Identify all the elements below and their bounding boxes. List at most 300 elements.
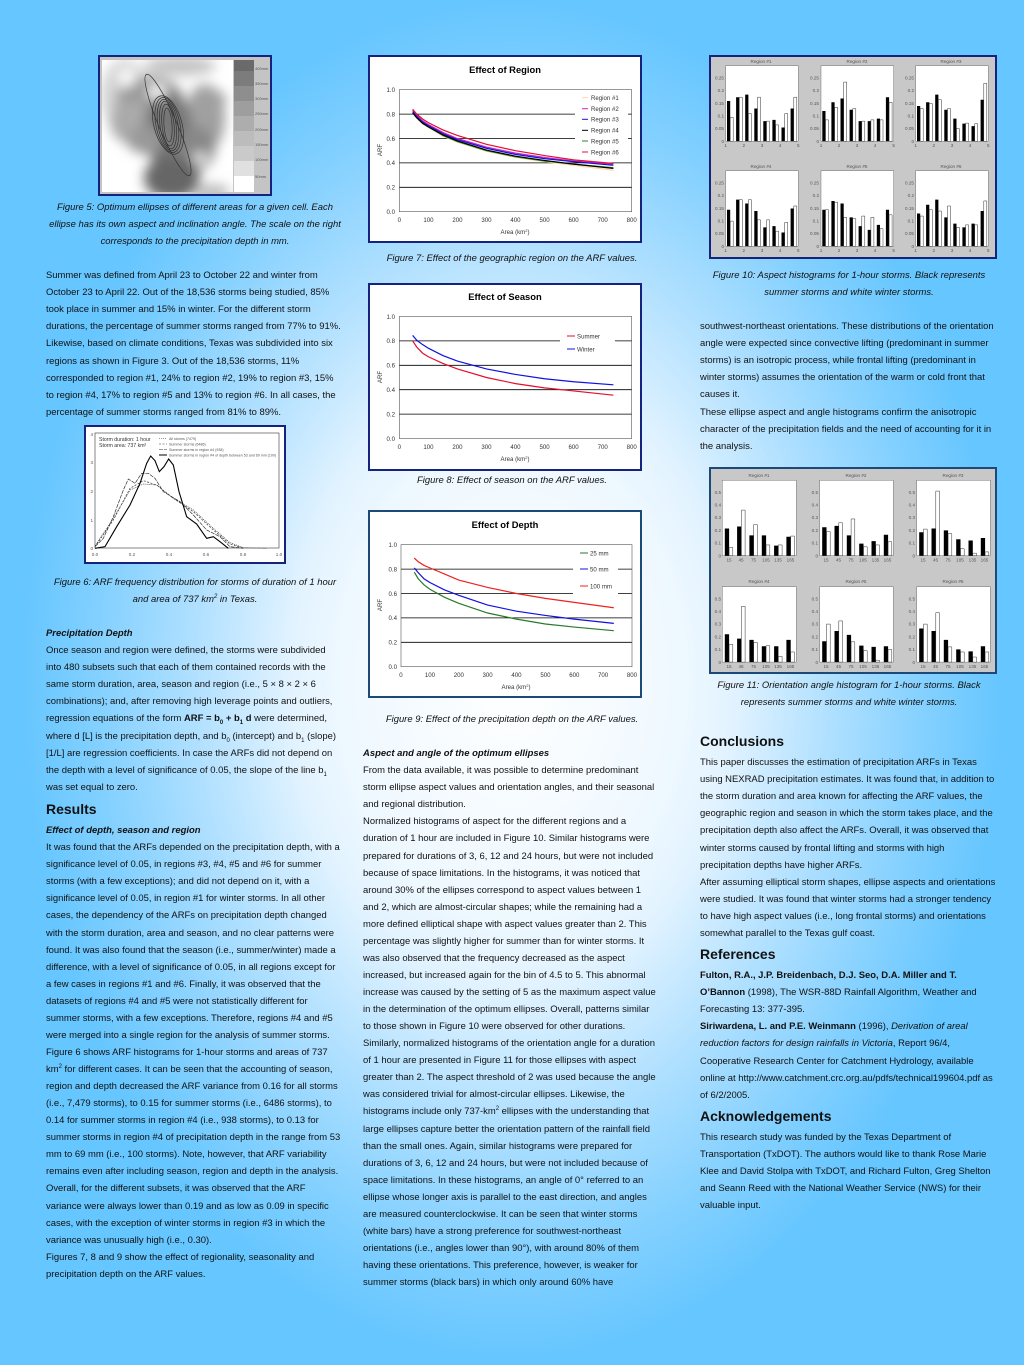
chart: effect of depth: 25 mm bbox=[590, 550, 609, 557]
text: acknowledgements: This research study was funded by the Texas Department of bbox=[700, 1132, 951, 1143]
text: orientation discussion: angle were expected since convective lifting (predominant in summer bbox=[700, 338, 989, 349]
chart: effect of season: ) bbox=[527, 456, 529, 463]
figure 5: optimum ellipses map bbox=[98, 55, 272, 196]
chart: effect of region: 700 bbox=[598, 217, 608, 224]
figure 11: orientation angle histograms: 105 bbox=[762, 664, 770, 669]
text: aspect and angle: orientations (i.e., angles lower than 90°), with around 80% of them bbox=[363, 1243, 639, 1254]
figure 11: orientation angle histograms: 0.4 bbox=[812, 609, 818, 614]
figure 5 caption bbox=[49, 202, 342, 247]
panel: region 2 angle: Region #2 bbox=[846, 473, 867, 478]
figure 10: aspect histograms: 4 bbox=[874, 248, 877, 253]
figure 11: orientation angle histograms: 75 bbox=[848, 664, 854, 669]
figure 11: orientation angle histograms: 0.3 bbox=[812, 515, 818, 520]
text: results: km2 for different cases. It can be seen that the accounting of season, bbox=[46, 1064, 332, 1075]
text: references: of 6/2/2005. bbox=[700, 1090, 750, 1101]
figure 10: aspect histograms: 4 bbox=[779, 143, 782, 148]
chart: effect of region: 1.0 bbox=[387, 87, 396, 94]
figure 11: orientation angle histograms: 0.3 bbox=[715, 515, 721, 520]
scale stripes: 350mm bbox=[255, 81, 269, 86]
chart: effect of season: 700 bbox=[598, 444, 608, 451]
text: precipitation depth bbox=[46, 645, 336, 793]
chart: effect of depth bbox=[368, 510, 642, 698]
text: results: (i.e., 7,479 storms), to 0.15 for summer storms (i.e., 6486 storms), to bbox=[46, 1098, 332, 1109]
chart: effect of region: 0.4 bbox=[387, 160, 396, 167]
text: acknowledgements: and Seann Reed with the National Weather Service (NWS) for their bbox=[700, 1183, 981, 1194]
chart: effect of depth: Area (km bbox=[502, 684, 526, 691]
figure 6: ARF frequency distribution: 0.0 bbox=[92, 552, 99, 557]
panel: region 1 aspect bbox=[726, 59, 798, 141]
text: results: were merged into a single region for the analysis of summer storms. bbox=[46, 1030, 330, 1041]
panel: region 1 aspect: Region #1 bbox=[751, 59, 772, 64]
figure 6: ARF frequency distribution: Summer storms in region #4 of depth between 53 and 69 mm (100) bbox=[169, 454, 276, 458]
figure 10: aspect histograms: 1 bbox=[914, 143, 917, 148]
text: precipitation depth: regression equations of the form ARF = b0 + b1 d were determined, bbox=[46, 713, 327, 726]
text: precipitation depth: where d [L] is the precipitation depth, and b0 (intercept) and b1 (slope) bbox=[46, 730, 336, 743]
figure 6: ARF frequency distribution: Storm duration: 1 hour bbox=[99, 437, 151, 443]
chart: effect of region: 400 bbox=[510, 217, 521, 224]
text: aspect and angle: (white bars) have a strong preference for southwest-northeast bbox=[363, 1226, 621, 1237]
figure 10: aspect histograms: 5 bbox=[987, 143, 990, 148]
panel: region 6 angle bbox=[917, 579, 990, 662]
chart: effect of region: 0 bbox=[398, 217, 402, 224]
figure 11: orientation angle histograms: 75 bbox=[945, 664, 951, 669]
scale stripes: 200mm bbox=[255, 127, 269, 132]
nested ellipses bbox=[138, 71, 198, 179]
figure 11: orientation angle histograms: 45 bbox=[933, 664, 938, 669]
figure 10: aspect histograms: 0 bbox=[911, 139, 914, 144]
chart: effect of season: 200 bbox=[452, 444, 463, 451]
figure 10: aspect histograms: 4 bbox=[969, 143, 972, 148]
figure 11: orientation angle histograms: 0.1 bbox=[909, 647, 915, 652]
figure 11: orientation angle histograms: 0.1 bbox=[715, 540, 721, 546]
figure 10: aspect histograms: 0.1 bbox=[718, 218, 724, 224]
chart: effect of depth: 0.8 bbox=[389, 566, 398, 573]
figure 10: aspect histograms: 5 bbox=[987, 248, 990, 253]
figure 10: aspect histograms: 5 bbox=[797, 143, 800, 148]
figure 10: aspect histograms: 0 bbox=[816, 244, 819, 249]
figure 6: ARF frequency distribution: 0.4 bbox=[166, 552, 173, 557]
figure 11: orientation angle histograms: 105 bbox=[956, 664, 964, 669]
figure 11: orientation angle histograms: 165 bbox=[981, 664, 989, 669]
figure 11: orientation angle histograms: 165 bbox=[981, 558, 989, 562]
figure 10: aspect histograms: 3 bbox=[761, 143, 764, 148]
text: aspect and angle: to those shown in Figure 10 were observed for other durations. bbox=[363, 1021, 625, 1032]
figure 5 caption: corresponds to the precipitation depth in mm. bbox=[101, 236, 289, 247]
figure 11: orientation angle histograms: 15 bbox=[920, 664, 926, 669]
panel: region 5 angle: Region #5 bbox=[846, 579, 867, 584]
figure 6: ARF frequency distribution: 4 bbox=[90, 432, 93, 437]
figure 10: aspect histograms: 4 bbox=[779, 248, 782, 253]
text: seasons and regions bbox=[46, 270, 341, 418]
text: aspect and angle: storm ellipse aspect values and orientation angles, and their seasonal bbox=[363, 782, 654, 793]
chart: effect of depth: 400 bbox=[511, 672, 522, 679]
figure 10 caption: summer storms and white winter storms. bbox=[764, 287, 934, 298]
text: results: cases, with the exception of winter storms in region #3 in which the bbox=[46, 1218, 325, 1229]
chart: effect of region: Region #6 bbox=[591, 149, 619, 156]
figure 11: orientation angle histograms: 15 bbox=[726, 558, 732, 562]
figure 10: aspect histograms: 4 bbox=[874, 143, 877, 148]
text: conclusions: to have high aspect values (i.e., long frontal storms) and orientations bbox=[700, 911, 986, 922]
text: results: a few cases in regions #1 and #6. Finally, it was observed that the bbox=[46, 979, 321, 990]
figure 11: orientation angle histograms: 0.3 bbox=[909, 515, 915, 520]
text: aspect and angle: around 30% of the ellipses correspond to aspect values between 1 bbox=[363, 885, 641, 896]
figure 11: orientation angle histograms: 105 bbox=[762, 558, 770, 562]
figure 9 caption: Figure 9: Effect of the precipitation depth on the ARF values. bbox=[386, 714, 638, 725]
text: aspect and angle: From the data available, it was possible to determine predominant bbox=[363, 765, 638, 776]
figure 11: orientation angle histograms bbox=[709, 467, 997, 674]
figure 5 caption: ellipse has its own aspect and inclination angle. The scale on the right bbox=[49, 219, 341, 230]
figure 11: orientation angle histograms: 165 bbox=[884, 664, 892, 669]
text: results: region and depth decreased the ARF variance from 0.16 for all storms bbox=[46, 1081, 338, 1092]
text: precipitation depth: into 480 subsets such that each of them contained records with the bbox=[46, 662, 326, 673]
subheading: precipitation depth: Precipitation Depth bbox=[46, 628, 133, 639]
figure 11: orientation angle histograms: 0.4 bbox=[715, 609, 721, 614]
chart: effect of season: 1.0 bbox=[387, 314, 396, 321]
text: precipitation depth: Once season and region were defined, the storms were subdivided bbox=[46, 645, 326, 656]
heading: references: References bbox=[700, 946, 776, 962]
text: orientation discussion: These ellipse aspect and angle histograms confirm the anisotropic bbox=[700, 406, 976, 418]
chart: effect of depth: 200 bbox=[454, 672, 464, 679]
figure 11: orientation angle histograms: 0 bbox=[718, 554, 721, 558]
text: results: with the storm duration, area and season, and no clear patterns were bbox=[46, 928, 334, 938]
chart: effect of depth: 800 bbox=[627, 672, 638, 679]
text: seasons and regions: percentage of summer storms ranged from 81% to 89%. bbox=[46, 407, 281, 418]
figure 6: ARF frequency distribution: 0.6 bbox=[203, 552, 210, 557]
figure 10: aspect histograms: 1 bbox=[724, 143, 727, 148]
chart: effect of season: 100 bbox=[423, 444, 434, 451]
figure 10: aspect histograms: 3 bbox=[856, 248, 859, 253]
figure 11: orientation angle histograms: 0.2 bbox=[812, 634, 818, 640]
figure 10: aspect histograms: 4 bbox=[969, 248, 972, 253]
figure 11: orientation angle histograms: 15 bbox=[726, 664, 732, 669]
figure 11: orientation angle histograms: 15 bbox=[920, 558, 926, 562]
text: results: storms (with a few exceptions); and did not depend on it, with a bbox=[46, 876, 309, 887]
panel: region 3 angle: Region #3 bbox=[943, 473, 964, 478]
chart: effect of region: Region #1 bbox=[591, 95, 619, 102]
figure 6: ARF frequency distribution: 2 bbox=[90, 489, 93, 494]
chart: effect of season: ARF bbox=[377, 371, 384, 383]
scale stripes: 300mm bbox=[255, 96, 269, 101]
text: aspect and angle: greater than 2. The aspect threshold of 2 was used because the angle bbox=[363, 1072, 656, 1083]
text: conclusions: This paper discusses the estimation of precipitation ARFs in Texas bbox=[700, 757, 977, 768]
text: seasons and regions: Likewise, based on climate conditions, Texas was subdivided into six bbox=[46, 338, 333, 349]
text: aspect and angle: was also observed that the frequency decreased as the aspect bbox=[363, 953, 625, 964]
figure 11: orientation angle histograms: 15 bbox=[823, 558, 829, 562]
text: conclusions: winter storms caused by frontal lifting and storms with high bbox=[700, 842, 944, 854]
text: precipitation depth: combinations); and, after removing high leverage points and outliers, bbox=[46, 696, 332, 707]
figure 11: orientation angle histograms: 0.2 bbox=[909, 528, 915, 533]
figure 10 caption: Figure 10: Aspect histograms for 1-hour storms. Black represents bbox=[713, 270, 985, 281]
figure 11: orientation angle histograms: 0.4 bbox=[909, 502, 915, 508]
chart: effect of region: 0.6 bbox=[387, 136, 396, 143]
text: results: It was found that the ARFs depended on the precipitation depth, with a bbox=[46, 842, 340, 853]
figure 10: aspect histograms: 0.15 bbox=[715, 101, 724, 106]
text: results: cases, the dependency of the ARFs on precipitation depth changed bbox=[46, 910, 327, 921]
chart: effect of season bbox=[368, 283, 642, 471]
heading: conclusions: Conclusions bbox=[700, 732, 784, 748]
chart: effect of season: 0.0 bbox=[387, 436, 396, 443]
figure 11: orientation angle histograms: 0.5 bbox=[715, 490, 721, 495]
text: conclusions: precipitation depths have higher ARFs. bbox=[700, 860, 862, 871]
scale stripes: 250mm bbox=[255, 111, 269, 116]
text: references: Forecasting 13: 377-395. bbox=[700, 1004, 805, 1015]
figure 10: aspect histograms: 0.1 bbox=[908, 114, 914, 118]
chart: effect of region: Region #2 bbox=[591, 106, 619, 113]
panel: region 5 aspect: Region #5 bbox=[847, 164, 868, 169]
text: conclusions bbox=[700, 757, 995, 939]
figure 10: aspect histograms: 0.05 bbox=[905, 126, 914, 131]
figure 10: aspect histograms: 3 bbox=[951, 248, 954, 253]
text: aspect and angle: was considered trivial for almost-circular ellipses. Likewise, the bbox=[363, 1089, 625, 1100]
text: aspect and angle: having these orientations. This preference, however, is weaker for bbox=[363, 1260, 638, 1271]
figure 10: aspect histograms: 0.2 bbox=[813, 88, 819, 93]
chart: effect of depth: 2 bbox=[526, 683, 529, 688]
panel: region 4 aspect bbox=[726, 164, 798, 246]
figure 11: orientation angle histograms: 135 bbox=[969, 664, 977, 669]
scale stripes: 100mm bbox=[255, 157, 269, 162]
panel: region 6 angle: Region #6 bbox=[943, 579, 964, 584]
text: seasons and regions: took place in summer and 15% in winter. For the different storm bbox=[46, 304, 311, 315]
chart: effect of depth: 0.2 bbox=[389, 640, 398, 647]
text: conclusions: using NEXRAD precipitation estimates. It was found that, in addition to bbox=[700, 774, 994, 785]
text: references: Siriwardena, L. and P.E. Weinmann (1996), Derivation of areal bbox=[700, 1021, 968, 1032]
figure 11: orientation angle histograms: 0.4 bbox=[909, 609, 915, 614]
figure 10: aspect histograms: 0.25 bbox=[810, 180, 819, 186]
chart: effect of region: 0.8 bbox=[387, 111, 396, 118]
figure 10: aspect histograms: 0.05 bbox=[715, 126, 724, 131]
subheading: effect of depth, season and region: Effect of depth, season and region bbox=[46, 825, 201, 836]
text: aspect and angle: and 2, which are almost-circular shapes; while the remaining had a bbox=[363, 902, 642, 913]
panel: region 3 angle bbox=[917, 473, 990, 556]
chart: effect of depth: Effect of Depth bbox=[472, 519, 539, 530]
chart: effect of depth: 0.4 bbox=[389, 615, 398, 622]
figure 10: aspect histograms: 0.2 bbox=[718, 88, 724, 93]
text: results: mm to 69 mm (i.e., 100 storms). Note, however, that ARF variability bbox=[46, 1149, 327, 1160]
chart: effect of depth: 0 bbox=[399, 672, 403, 679]
chart: effect of depth: 100 bbox=[425, 672, 436, 679]
text: results: Figures 7, 8 and 9 show the effect of regionality, seasonality and bbox=[46, 1252, 314, 1263]
figure 10: aspect histograms: 0.1 bbox=[908, 218, 914, 224]
chart: effect of region: 600 bbox=[569, 217, 579, 224]
figure 10: aspect histograms: 2 bbox=[743, 248, 746, 253]
figure 11: orientation angle histograms: 105 bbox=[956, 558, 964, 562]
figure 11: orientation angle histograms: 0.5 bbox=[812, 596, 818, 602]
figure 10: aspect histograms: 0.1 bbox=[813, 218, 819, 224]
text: references: reduction factors for design rainfalls in Victoria, Report 96/4, bbox=[700, 1038, 950, 1049]
text: aspect and angle: are measured counterclockwise. It can be seen that winter storms bbox=[363, 1209, 637, 1220]
figure 10: aspect histograms: 1 bbox=[724, 248, 727, 253]
figure 11: orientation angle histograms: 45 bbox=[836, 558, 841, 562]
figure 11: orientation angle histograms: 105 bbox=[859, 664, 867, 669]
scale stripes: 150mm bbox=[255, 142, 269, 147]
chart: effect of region: 2 bbox=[525, 228, 528, 233]
text: precipitation depth: same storm duration, area, season and region (i.e., 5 × 8 × 2 × 6 bbox=[46, 679, 316, 690]
figure 11: orientation angle histograms: 0.5 bbox=[715, 596, 721, 602]
text: aspect and angle: in the determination of the optimum ellipses. Overall, patterns similar bbox=[363, 1004, 649, 1015]
panel: region 2 angle bbox=[820, 473, 893, 556]
text: results: significance level of 0.05, in region #1 for winter storms. In all other bbox=[46, 893, 325, 904]
text: results: difference, with a level of significance of 0.05, in all regions except for bbox=[46, 962, 335, 973]
figure 5 caption: Figure 5: Optimum ellipses of different areas for a given cell. Each bbox=[57, 202, 333, 213]
figure 11: orientation angle histograms: 0.2 bbox=[715, 528, 721, 533]
chart: effect of depth: 500 bbox=[540, 672, 551, 679]
chart: effect of season: 2 bbox=[525, 455, 528, 460]
figure 11: orientation angle histograms: 45 bbox=[836, 664, 841, 669]
figure 11: orientation angle histograms: 75 bbox=[848, 558, 854, 562]
text: precipitation depth: [1/L] are regression coefficients. In case the ARFs did not depend on bbox=[46, 748, 332, 759]
text: references: online at http://www.catchment.crc.org.au/pdfs/technical199604.pdf as bbox=[700, 1073, 993, 1084]
figure 10: aspect histograms: 5 bbox=[892, 248, 895, 253]
figure 11: orientation angle histograms: 135 bbox=[774, 664, 782, 669]
figure 11: orientation angle histograms: 0.5 bbox=[909, 596, 915, 602]
figure 11: orientation angle histograms: 0 bbox=[718, 660, 721, 665]
text: conclusions: geographic region and season in which the storm takes place, and the bbox=[700, 808, 993, 819]
text: seasons and regions: regions as shown in Figure 3. Out of the 18,536 storms, 11% bbox=[46, 356, 299, 366]
figure 8 caption: Figure 8: Effect of season on the ARF values. bbox=[417, 475, 607, 486]
text: results: summer storms, with a few exceptions. Therefore, regions #4 and #5 bbox=[46, 1013, 333, 1024]
chart: effect of depth: 0.0 bbox=[389, 664, 398, 671]
figure 10: aspect histograms: 2 bbox=[743, 143, 746, 148]
text: precipitation depth: the depth with a level of significance of 0.05, the slope of the line b1 bbox=[46, 765, 327, 778]
figure 11: orientation angle histograms: 105 bbox=[859, 558, 867, 562]
figure 10: aspect histograms: 2 bbox=[933, 143, 936, 148]
heading: results: Results bbox=[46, 800, 97, 816]
figure 11: orientation angle histograms: 45 bbox=[738, 664, 744, 669]
chart: effect of region: 300 bbox=[481, 217, 492, 224]
figure 10: aspect histograms: 0.2 bbox=[718, 193, 724, 198]
text: conclusions: After assuming elliptical storm shapes, ellipse aspects and orientations bbox=[700, 877, 995, 888]
figure 11: orientation angle histograms: 135 bbox=[774, 558, 782, 562]
chart: effect of region: 500 bbox=[540, 217, 550, 224]
figure 11: orientation angle histograms: 0.1 bbox=[812, 540, 818, 546]
text: results: Overall, for the different subsets, it was observed that the ARF bbox=[46, 1183, 305, 1194]
figure 10: aspect histograms: 0.05 bbox=[715, 231, 724, 236]
text: acknowledgements bbox=[700, 1132, 990, 1211]
chart: effect of season: 0.2 bbox=[387, 411, 396, 418]
figure 11: orientation angle histograms: 0.3 bbox=[715, 622, 721, 626]
chart: effect of region: ) bbox=[527, 229, 529, 236]
figure 10: aspect histograms: 3 bbox=[761, 248, 764, 253]
figure 11: orientation angle histograms: 0.1 bbox=[715, 647, 721, 652]
chart: effect of region: 0.0 bbox=[387, 209, 396, 216]
figure 10: aspect histograms: 0.05 bbox=[810, 231, 819, 236]
text: seasons and regions: corresponded to region #1, 24% to region #2, 19% to region #3, 15% bbox=[46, 373, 334, 384]
figure 10: aspect histograms: 0.25 bbox=[810, 76, 819, 80]
panel: region 6 aspect bbox=[916, 164, 988, 246]
chart: effect of depth: 100 mm bbox=[590, 583, 612, 590]
chart: effect of region: 800 bbox=[627, 217, 637, 224]
text: orientation discussion: character of the precipitation fields and the need of accounting for it in bbox=[700, 424, 991, 435]
chart: effect of depth: 0.6 bbox=[389, 591, 398, 598]
figure 10: aspect histograms: 0.2 bbox=[908, 193, 914, 198]
figure 10: aspect histograms: 2 bbox=[838, 143, 841, 148]
chart: effect of depth: 50 mm bbox=[590, 566, 609, 573]
figure 6: ARF frequency distribution: 1.0 bbox=[276, 552, 283, 557]
figure 11 caption: Figure 11: Orientation angle histogram for 1-hour storms. Black bbox=[717, 680, 981, 691]
panel: region 2 aspect: Region #2 bbox=[847, 59, 868, 64]
text: aspect and angle: histograms include only 737-km2 ellipses with the understanding that bbox=[363, 1106, 649, 1117]
figure 11: orientation angle histograms: 0.2 bbox=[812, 528, 818, 533]
text: aspect and angle: Normalized histograms of aspect for the different regions and a bbox=[363, 816, 626, 827]
text: aspect and angle: more defined elliptical shape with aspect values greater than 2. This bbox=[363, 919, 647, 930]
chart: effect of region: 100 bbox=[423, 217, 434, 224]
scale stripes bbox=[234, 60, 269, 192]
figure 6: ARF frequency distribution: All storms (7479) bbox=[169, 437, 196, 441]
text: orientation discussion: winter storms) assumes the orientation of the warm or cold front that bbox=[700, 372, 985, 383]
figure 11: orientation angle histograms: 135 bbox=[969, 558, 977, 562]
text: aspect and angle: increased, but increased again for the bin of 4.5 to 5. This abnormal bbox=[363, 970, 646, 981]
figure 7 caption: Figure 7: Effect of the geographic region on the ARF values. bbox=[387, 253, 637, 264]
figure 11: orientation angle histograms: 75 bbox=[945, 558, 951, 562]
text: conclusions: somewhat parallel to the Texas gulf coast. bbox=[700, 928, 875, 939]
text: results: found. It was also found that the season (i.e., summer/winter) made a bbox=[46, 945, 336, 956]
figure 10: aspect histograms: 0.15 bbox=[810, 206, 819, 211]
chart: effect of season: 500 bbox=[540, 444, 550, 451]
figure 10: aspect histograms bbox=[709, 55, 997, 259]
figure 6: ARF frequency distribution bbox=[84, 425, 286, 564]
figure 11: orientation angle histograms: 135 bbox=[872, 558, 880, 562]
heading: acknowledgements: Acknowledgements bbox=[700, 1108, 831, 1124]
figure 11: orientation angle histograms: 45 bbox=[933, 558, 938, 562]
chart: effect of season: Winter bbox=[577, 346, 595, 353]
figure 11: orientation angle histograms: 75 bbox=[751, 664, 756, 669]
figure 11: orientation angle histograms: 0 bbox=[912, 660, 915, 665]
figure 6: ARF frequency distribution: 0.8 bbox=[240, 552, 247, 557]
text: results: variance were always lower than 0.19 and as low as 0.09 in specific bbox=[46, 1200, 329, 1212]
figure 10: aspect histograms: 0.15 bbox=[810, 101, 819, 106]
scale stripes: 400mm bbox=[255, 66, 269, 71]
figure 10 caption bbox=[713, 270, 985, 298]
text: aspect and angle: duration of 1 hour are included in Figure 10. Similar histograms were bbox=[363, 833, 649, 844]
text: references: Fulton, R.A., J.P. Breidenbach, D.J. Seo, D.A. Miller and T. bbox=[700, 970, 957, 981]
text: aspect and angle: percentage was slightly higher for summer than for winter storms. It bbox=[363, 936, 644, 947]
chart: effect of season: Area (km bbox=[501, 456, 525, 463]
figure 6: ARF frequency distribution: 0.2 bbox=[129, 552, 136, 557]
chart: effect of season: 400 bbox=[510, 444, 521, 451]
figure 11: orientation angle histograms: 0.3 bbox=[909, 622, 915, 626]
figure 11: orientation angle histograms: 165 bbox=[787, 664, 795, 669]
figure 11: orientation angle histograms: 0.4 bbox=[715, 502, 721, 508]
text: aspect and angle: space limitations. In these histograms, an angle of 0° referred to an bbox=[363, 1175, 643, 1186]
subheading: aspect and angle: Aspect and angle of the optimum ellipses bbox=[363, 748, 549, 759]
figure 11: orientation angle histograms: 165 bbox=[787, 558, 795, 562]
chart: effect of depth: 1.0 bbox=[389, 542, 398, 549]
figure 10: aspect histograms: 5 bbox=[797, 248, 800, 253]
figure 10: aspect histograms: 0.25 bbox=[905, 76, 914, 80]
figure 6: ARF frequency distribution: Storm area: 737 km² bbox=[99, 443, 147, 449]
text: seasons and regions: Summer was defined from April 23 to October 22 and winter from bbox=[46, 270, 318, 281]
text: references bbox=[700, 970, 993, 1101]
chart: effect of season: 0.4 bbox=[387, 387, 396, 394]
chart: effect of region: Region #4 bbox=[591, 128, 619, 135]
text: results: datasets of regions #4 and #5 were not statistically different for bbox=[46, 996, 308, 1007]
chart: effect of season: 0.6 bbox=[387, 363, 396, 370]
figure 10: aspect histograms: 0.15 bbox=[905, 206, 914, 211]
figure 6: ARF frequency distribution: 1 bbox=[90, 518, 93, 523]
figure 11: orientation angle histograms: 0.4 bbox=[812, 502, 818, 508]
text: orientation discussion: the analysis. bbox=[700, 441, 752, 452]
text: conclusions: precipitation depth also affect the ARFs. Overall, it was observed that bbox=[700, 825, 988, 836]
figure 11: orientation angle histograms: 0.1 bbox=[812, 647, 818, 652]
figure 6 caption: and area of 737 km2 in Texas. bbox=[133, 594, 257, 605]
figure 11: orientation angle histograms: 75 bbox=[751, 558, 756, 562]
text: orientation discussion bbox=[700, 321, 994, 452]
panel: region 5 angle bbox=[820, 579, 893, 662]
figure 11: orientation angle histograms: 0.2 bbox=[909, 634, 915, 640]
figure 10: aspect histograms: 0 bbox=[911, 244, 914, 249]
figure 10: aspect histograms: 0.1 bbox=[718, 114, 724, 118]
text: aspect and angle: summer storms (black bars) in which only around 60% have bbox=[363, 1277, 613, 1288]
